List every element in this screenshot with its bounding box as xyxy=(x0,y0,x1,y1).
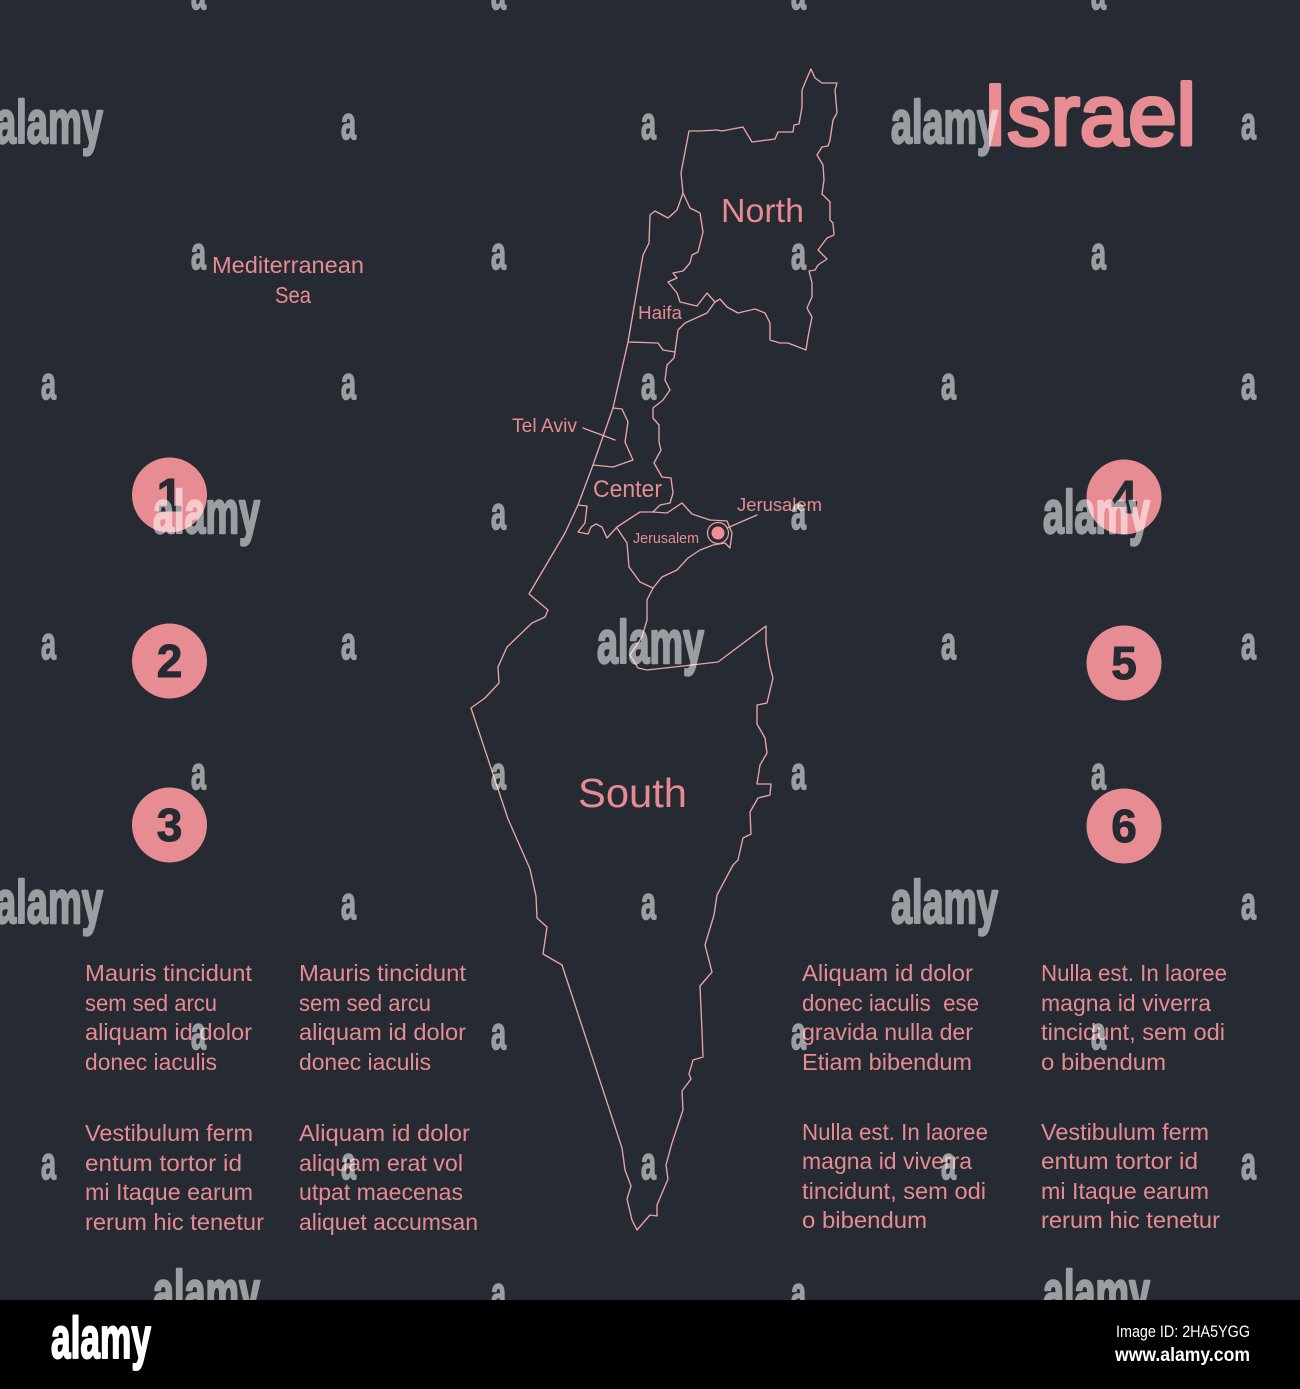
text block: column 2 top: Mauris tincidunt xyxy=(299,960,467,986)
text block: column 2 top: donec iaculis xyxy=(299,1049,431,1075)
region labels: Jerusalem xyxy=(737,495,822,515)
text block: column 2 bottom: utpat maecenas xyxy=(299,1179,463,1205)
watermark: small a marks: a xyxy=(341,1137,356,1189)
region labels: South xyxy=(578,770,687,816)
text block: column 1 top xyxy=(85,960,253,1075)
number badge 5 xyxy=(1086,626,1162,700)
text block: column 4 top: magna id viverra xyxy=(1041,990,1211,1016)
watermark: small a marks: a xyxy=(341,357,356,409)
number badge 2: 2 xyxy=(157,635,182,687)
sea label: Sea xyxy=(275,282,311,308)
number badge 1: 1 xyxy=(157,469,182,521)
sea label: Mediterranean xyxy=(212,252,364,278)
text block: column 1 top: donec iaculis xyxy=(85,1049,217,1075)
watermark: large alamy marks: alamy xyxy=(153,479,260,546)
text block: column 1 bottom: mi Itaque earum xyxy=(85,1179,253,1205)
text block: column 1 top: sem sed arcu xyxy=(85,990,217,1016)
region labels: Center xyxy=(593,476,662,503)
text block: column 1 bottom xyxy=(85,1120,264,1235)
watermark: small a marks: a xyxy=(941,617,956,669)
watermark: small a marks: a xyxy=(941,1137,956,1189)
text block: column 2 bottom: aliquam erat vol xyxy=(299,1150,463,1176)
watermark: small a marks: a xyxy=(1091,1007,1106,1059)
watermark: small a marks: a xyxy=(41,1137,56,1189)
number badge 3: 3 xyxy=(157,799,182,851)
watermark: large alamy marks: alamy xyxy=(0,869,103,936)
text block: column 2 top: sem sed arcu xyxy=(299,990,431,1016)
watermark: small a marks: a xyxy=(1241,357,1256,409)
tel aviv leader line xyxy=(583,428,615,440)
text block: column 2 bottom: Aliquam id dolor xyxy=(299,1120,470,1146)
watermark: small a marks: a xyxy=(1241,617,1256,669)
text block: column 3 top xyxy=(802,960,979,1075)
map of Israel xyxy=(471,69,837,1230)
text block: column 3 bottom: tincidunt, sem odi xyxy=(802,1178,986,1204)
region labels: Tel Aviv xyxy=(512,416,577,437)
watermark: small a marks: a xyxy=(191,1007,206,1059)
number badge 2 xyxy=(132,624,207,698)
watermark: large alamy marks xyxy=(0,89,1150,1326)
watermark: small a marks: a xyxy=(1241,1137,1256,1189)
title: Israel xyxy=(983,68,1196,164)
outer border xyxy=(471,69,837,1230)
number badge 4 xyxy=(1086,460,1162,534)
watermark: small a marks: a xyxy=(641,877,656,929)
text block: column 1 bottom: rerum hic tenetur xyxy=(85,1209,264,1235)
region labels: Jerusalem xyxy=(633,530,699,547)
text block: column 4 bottom: entum tortor id xyxy=(1041,1148,1198,1174)
text block: column 3 top: Etiam bibendum xyxy=(802,1049,972,1075)
number badge 6: 6 xyxy=(1111,800,1137,852)
watermark: small a marks: a xyxy=(1091,747,1106,799)
haifa-center boundary xyxy=(628,342,675,352)
sea label xyxy=(212,252,364,308)
text block: column 2 top xyxy=(299,960,467,1075)
footer url: www.alamy.com xyxy=(1114,1345,1250,1366)
watermark: small a marks: a xyxy=(641,357,656,409)
tel aviv boundary xyxy=(593,408,633,467)
text block: column 4 bottom: Vestibulum ferm xyxy=(1041,1119,1209,1145)
watermark: small a marks: a xyxy=(491,747,506,799)
footer bar xyxy=(0,1300,1300,1389)
text block: column 2 top: aliquam id dolor xyxy=(299,1019,466,1045)
text block: column 4 top: o bibendum xyxy=(1041,1049,1166,1075)
jerusalem marker xyxy=(708,522,728,544)
text block: column 1 top: Mauris tincidunt xyxy=(85,960,253,986)
text block: column 3 bottom xyxy=(802,1119,988,1233)
watermark: small a marks: a xyxy=(341,877,356,929)
watermark: small a marks: a xyxy=(341,97,356,149)
watermark: small a marks: a xyxy=(41,617,56,669)
text block: column 2 bottom: aliquet accumsan xyxy=(299,1209,478,1235)
watermark: large alamy marks: alamy xyxy=(153,1259,260,1326)
text block: column 3 top: Aliquam id dolor xyxy=(802,960,973,986)
text block: column 1 bottom: entum tortor id xyxy=(85,1150,242,1176)
text block: column 3 top: gravida nulla der xyxy=(802,1019,973,1045)
text block: column 2 bottom xyxy=(299,1120,478,1235)
watermark: small a marks: a xyxy=(491,227,506,279)
text block: column 3 bottom: magna id viverra xyxy=(802,1148,972,1174)
region labels xyxy=(512,192,822,816)
number badge 6 xyxy=(1086,788,1162,864)
text block: column 3 bottom: Nulla est. In laoree xyxy=(802,1119,988,1145)
north-haifa boundary xyxy=(668,193,715,306)
region labels: Haifa xyxy=(638,303,683,323)
watermark: small a marks: a xyxy=(641,1137,656,1189)
watermark: small a marks: a xyxy=(1241,97,1256,149)
text block: column 1 bottom: Vestibulum ferm xyxy=(85,1120,253,1146)
footer logo: alamy xyxy=(51,1306,151,1371)
region labels: North xyxy=(721,192,804,229)
watermark: large alamy marks: alamy xyxy=(891,869,998,936)
watermark: small a marks: a xyxy=(791,1267,806,1319)
watermark: small a marks: a xyxy=(941,357,956,409)
number badge 1 xyxy=(132,458,207,532)
number badge 4: 4 xyxy=(1111,471,1137,523)
watermark: small a marks: a xyxy=(491,1267,506,1319)
watermark: small a marks: a xyxy=(791,227,806,279)
text block: column 4 top xyxy=(1041,960,1227,1075)
watermark: large alamy marks: alamy xyxy=(891,89,998,156)
watermark: small a marks: a xyxy=(791,1007,806,1059)
watermark: small a marks: a xyxy=(1241,877,1256,929)
watermark: small a marks: a xyxy=(41,357,56,409)
text block: column 3 bottom: o bibendum xyxy=(802,1207,927,1233)
center-south boundary xyxy=(578,505,653,538)
watermark: large alamy marks: alamy xyxy=(1043,1259,1150,1326)
text block: column 4 bottom xyxy=(1041,1119,1220,1233)
text block: column 4 bottom: rerum hic tenetur xyxy=(1041,1207,1220,1233)
number badge 5: 5 xyxy=(1111,637,1137,689)
jerusalem district west boundary xyxy=(617,528,653,588)
text block: column 4 bottom: mi Itaque earum xyxy=(1041,1178,1209,1204)
watermark: small a marks: a xyxy=(191,747,206,799)
watermark: small a marks: a xyxy=(791,747,806,799)
watermark: small a marks: a xyxy=(491,487,506,539)
watermark: large alamy marks: alamy xyxy=(1043,479,1150,546)
watermark: small a marks: a xyxy=(491,1007,506,1059)
image id: Image ID: 2HA5YGG xyxy=(1116,1322,1250,1341)
text block: column 1 top: aliquam id dolor xyxy=(85,1019,252,1045)
watermark: small a marks: a xyxy=(641,97,656,149)
watermark: small a marks: a xyxy=(791,487,806,539)
jerusalem leader line xyxy=(727,515,757,528)
watermark: small a marks: a xyxy=(191,227,206,279)
watermark: small a marks: a xyxy=(341,617,356,669)
text block: column 4 top: tincidunt, sem odi xyxy=(1041,1019,1225,1045)
watermark: large alamy marks: alamy xyxy=(597,609,704,676)
text block: column 3 top: donec iaculis ese xyxy=(802,990,979,1016)
number badge 3 xyxy=(132,788,207,862)
text block: column 4 top: Nulla est. In laoree xyxy=(1041,960,1227,986)
watermark: large alamy marks: alamy xyxy=(0,89,103,156)
watermark: small a marks: a xyxy=(1091,227,1106,279)
